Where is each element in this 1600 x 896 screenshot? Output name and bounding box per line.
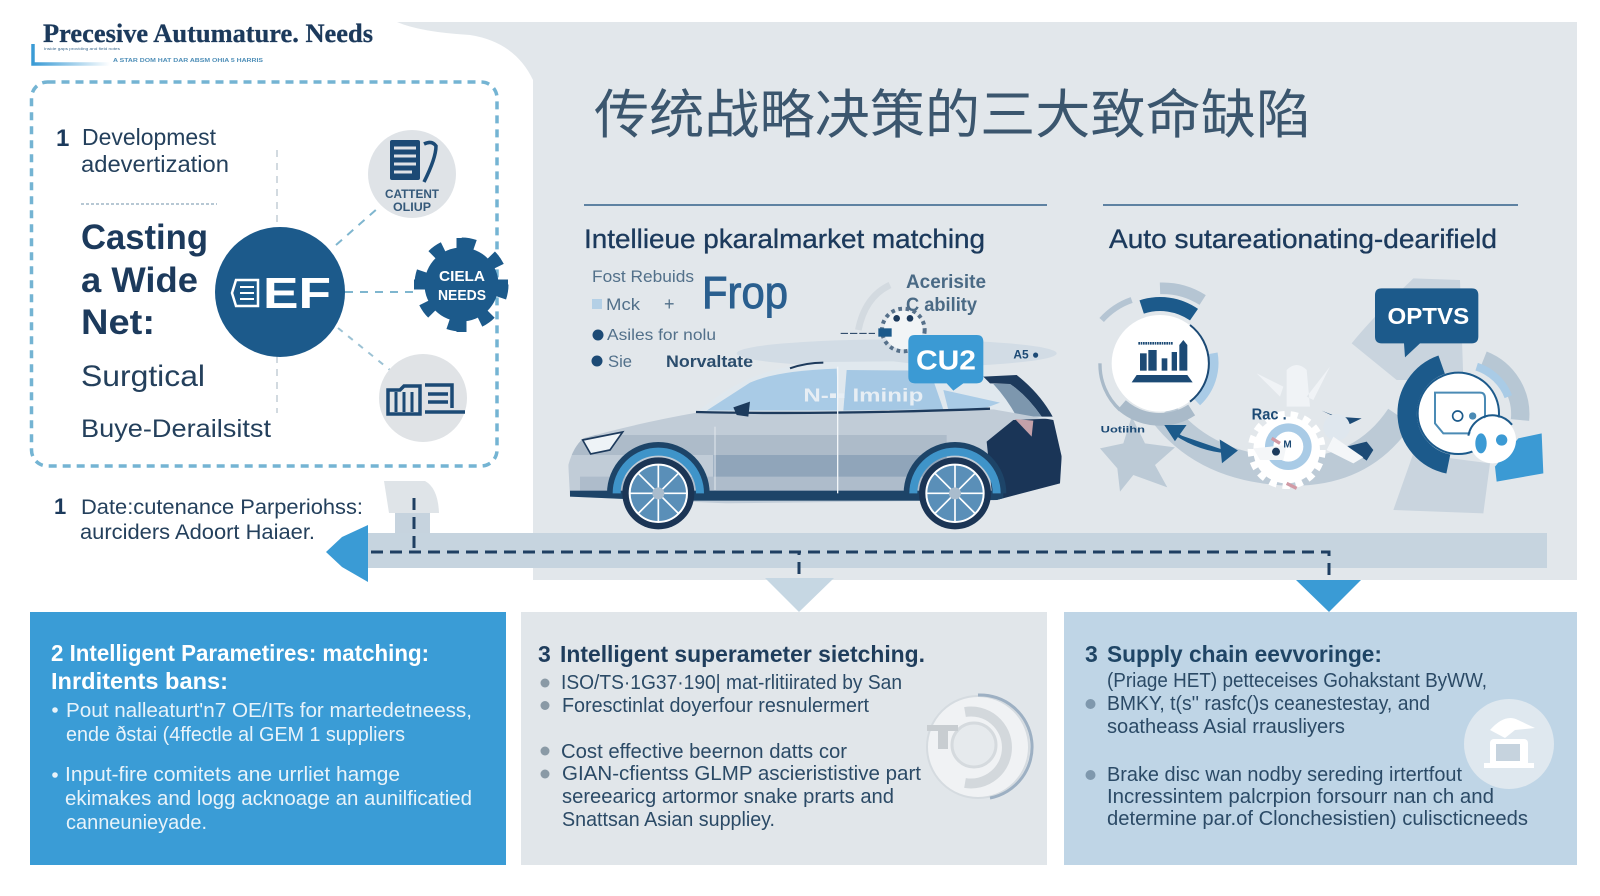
panel: intelligent superameter sietching xyxy=(521,612,1047,865)
bullet list xyxy=(52,699,472,834)
icon: content circle: CATTENT xyxy=(385,187,440,201)
bullet list: ende ðstai (4ffectle al GEM 1 suppliers xyxy=(66,723,405,746)
icon: brake disc xyxy=(927,695,1032,798)
step number and label: 1 xyxy=(56,125,69,152)
bullet list: soatheass Asial rrausliyers xyxy=(1107,716,1345,738)
heading: 3 xyxy=(1085,641,1098,667)
column rules xyxy=(584,204,1518,206)
connecting arc band xyxy=(1163,413,1400,472)
text block: car specs list xyxy=(592,267,986,371)
icon: central EF circle xyxy=(215,227,345,357)
grey blob behind the speech bubble xyxy=(1352,278,1490,513)
text block: car specs list: Sie xyxy=(608,352,632,371)
label: left ring: Uotiihn xyxy=(1101,425,1145,435)
subheading: surgical: Surgtical xyxy=(81,360,205,393)
text block: partnerships note: aurciders Adoort Haiaer. xyxy=(80,521,315,544)
icon: gears and wrench: M xyxy=(1283,439,1292,450)
heading: 3 xyxy=(538,641,551,667)
icon: central EF circle: EF xyxy=(263,269,331,318)
left ring icon with bar chart xyxy=(1100,288,1214,419)
bullet list: (Priage HET) petteceises Gohakstant ByWW, xyxy=(1107,670,1487,692)
ellipse behind the car: A5 ● xyxy=(1013,347,1039,361)
panel: dashed box casting a wide net xyxy=(32,82,508,466)
callout: OPTVS speech bubble: OPTVS xyxy=(1387,303,1469,329)
car mirror xyxy=(733,402,750,417)
icon: gear needs: NEEDS xyxy=(438,287,486,304)
step number and label: Developmest xyxy=(82,124,217,150)
text block: car specs list: Acerisite xyxy=(906,272,986,293)
bullet list xyxy=(540,672,921,831)
front wheel xyxy=(622,457,694,529)
heading: casting a wide net: Casting xyxy=(81,218,208,257)
text block: car specs list: Norvaltate xyxy=(666,352,753,371)
bullet list: Pout nalleaturt'n7 OE/ITs for martedetneess, xyxy=(66,699,472,722)
heading: casting a wide net xyxy=(81,218,208,342)
title block: Inside gaps providing and field notes xyxy=(44,46,120,51)
illustration: supply automation cycle xyxy=(1100,278,1543,513)
text block: car specs list: + xyxy=(664,294,675,314)
bullet list: GIAN-cfientss GLMP ascierististive part xyxy=(562,763,921,785)
step number and label: adevertization xyxy=(81,151,229,177)
icon: gear needs xyxy=(414,238,508,332)
rear wheel xyxy=(919,457,991,529)
car illustration xyxy=(560,285,1067,529)
wheel arches xyxy=(610,445,1003,493)
icon: folder and bubble xyxy=(1464,411,1543,482)
bullet list: canneunieyade. xyxy=(66,811,207,834)
text block: partnerships note: Date:cutenance Parperiohss: xyxy=(81,496,363,519)
car windows xyxy=(707,363,1053,417)
bullet list: ISO/TS·1G37·190| mat-rlitiirated by San xyxy=(561,672,902,694)
heading: column one: Intellieue pkaralmarket matching xyxy=(584,224,985,254)
car headlight xyxy=(583,432,623,454)
car greenhouse xyxy=(697,361,1053,423)
text block: car specs list: Frop xyxy=(702,267,788,318)
bullet list: BMKY, t(s'' rasfc()s ceanestestay, and xyxy=(1107,693,1430,715)
background panel: main grey area xyxy=(397,22,1577,580)
heading: column two: Auto sutareationating-dearifield xyxy=(1109,224,1497,254)
heading: Intelligent superameter sietching. xyxy=(560,641,925,667)
arrow: double-headed curve xyxy=(1167,427,1235,460)
badge: CU2: CU2 xyxy=(916,344,976,375)
callout: OPTVS speech bubble xyxy=(1375,288,1478,357)
arrow: horizontal connector bar with dashed path xyxy=(326,481,1547,612)
icon: gear above the car xyxy=(878,309,925,351)
icon: gear needs: CIELA xyxy=(439,268,485,285)
text block: car specs list: Mck xyxy=(606,295,641,314)
heading: 2 Intelligent Parametires: matching: xyxy=(51,640,429,666)
heading: Inrditents bans: xyxy=(51,668,228,694)
icon: content circle xyxy=(368,130,456,218)
ellipse behind the car xyxy=(737,285,1057,367)
title block: A STAR DOM HAT DAR ABSM OHIA 5 HARRIS xyxy=(113,58,263,64)
text block: car specs list: Fost Rebuids xyxy=(592,267,694,286)
step number and label xyxy=(56,124,229,177)
car windows: N-▪▪ Iminip xyxy=(803,385,923,406)
bullet list: Incressintem palcrpion forsourr nan ch and xyxy=(1107,786,1494,808)
heading: Supply chain eevvoringe: xyxy=(1107,641,1382,667)
bullet list: Cost effective beernon datts cor xyxy=(561,741,847,763)
bullet list: Foresctinlat doyerfour resnulermert xyxy=(562,695,869,717)
badge: CU2 xyxy=(908,335,983,391)
icon: gears and wrench xyxy=(1251,365,1373,488)
bullet list: Snattsan Asian suppliey. xyxy=(562,809,775,831)
heading: main chinese title: 传统战略决策的三大致命缺陷 xyxy=(594,86,1311,145)
title block: Precesive Autumature. Needs xyxy=(43,19,373,48)
heading: casting a wide net: Net: xyxy=(81,303,155,342)
right ring icon xyxy=(1407,360,1520,464)
text block: partnerships note xyxy=(54,494,363,544)
heading: casting a wide net: a Wide xyxy=(81,261,198,300)
panel: intelligent parameter matching xyxy=(30,612,506,865)
panel: supply chain xyxy=(1064,612,1577,865)
car body xyxy=(568,410,1062,504)
label: rac: Rac . xyxy=(1252,406,1287,423)
icon: content circle: OLIUP xyxy=(393,200,431,214)
text block: partnerships note: 1 xyxy=(54,494,66,519)
bullet list: determine par.of Clonchesistien) culiscticneeds xyxy=(1107,808,1528,830)
icon: factory badge xyxy=(1464,699,1554,789)
bullet list: ekimakes and logg acknoage an aunilficatied xyxy=(65,787,472,810)
icon: factory circle xyxy=(379,354,467,442)
text block: car specs list: C ability xyxy=(906,295,977,316)
subheading: buyer detail: Buye-Derailsitst xyxy=(81,415,271,443)
bullet list: Brake disc wan nodby sereding irtertfout xyxy=(1107,764,1462,786)
title block xyxy=(33,19,373,64)
text block: car specs list: Asiles for nolu xyxy=(607,327,716,344)
star xyxy=(1100,417,1175,492)
bullet list xyxy=(1086,670,1528,830)
bullet list: sereearicg artormor snake prarts and xyxy=(562,786,894,808)
bullet list: Input-fire comitets ane urrliet hamge xyxy=(65,763,400,786)
heading xyxy=(51,640,429,694)
